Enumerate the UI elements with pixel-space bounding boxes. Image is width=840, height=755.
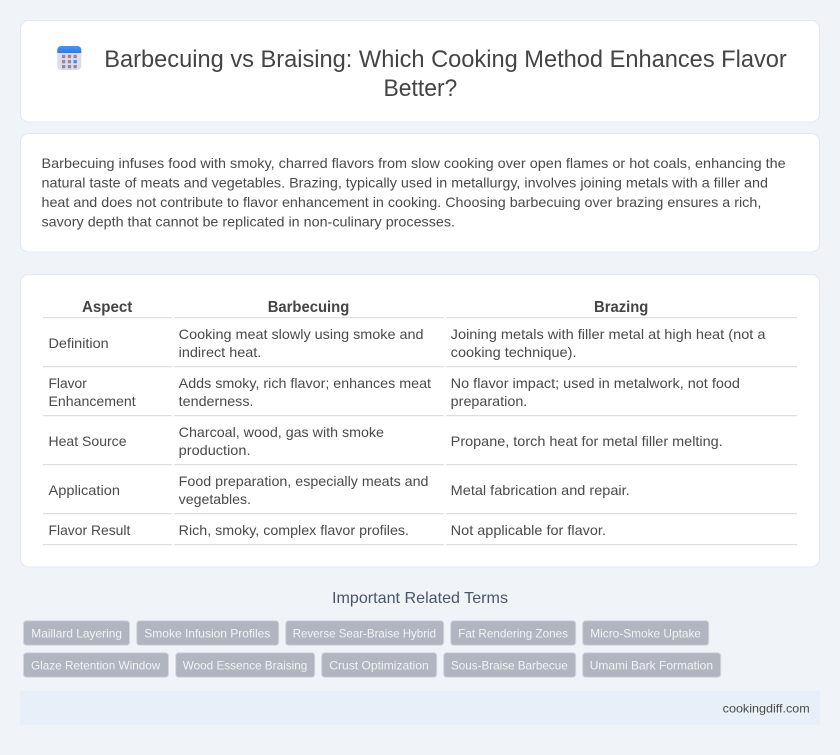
- row: flavor enhancement: No flavor impact; used in metalwork, not food: [451, 375, 740, 391]
- related term tags: Sous-Braise Barbecue: [451, 658, 568, 672]
- row: heat source: [48, 424, 723, 458]
- intro paragraph: natural taste of meats and vegetables. Brazing, typically used in metallurgy, involves joining metals with a filler and: [42, 174, 768, 190]
- row: definition: Joining metals with filler metal at high heat (not a: [451, 326, 766, 342]
- row: definition: Definition: [48, 335, 109, 351]
- related term tags: Micro-Smoke Uptake: [590, 626, 701, 640]
- row: heat source: Charcoal, wood, gas with smoke: [179, 424, 384, 440]
- title text: [104, 46, 787, 102]
- title text: Barbecuing vs Braising: Which Cooking Method Enhances Flavor: [104, 46, 787, 73]
- row: flavor enhancement: tenderness.: [179, 393, 254, 409]
- title text: Better?: [384, 75, 457, 102]
- row: definition: Cooking meat slowly using smoke and: [179, 326, 424, 342]
- panel: comparison table: [20, 274, 820, 567]
- row: definition: cooking technique).: [451, 344, 576, 360]
- row: flavor enhancement: Flavor: [48, 375, 87, 391]
- table header: Aspect: [82, 299, 133, 316]
- row: flavor result: [48, 522, 606, 538]
- row: flavor result: Flavor Result: [48, 522, 130, 538]
- row: application: Metal fabrication and repair.: [451, 482, 630, 498]
- related term tags: [24, 621, 721, 677]
- table header: Barbecuing: [268, 299, 349, 316]
- heading: important related terms: Important Related Terms: [332, 590, 508, 607]
- related term tags: Umami Bark Formation: [590, 658, 713, 672]
- related term tags: Crust Optimization: [329, 658, 429, 672]
- table header: [82, 299, 648, 316]
- related term tags: Wood Essence Braising: [183, 658, 307, 672]
- related term tags: Reverse Sear-Braise Hybrid: [293, 626, 436, 640]
- related term tags: Smoke Infusion Profiles: [144, 626, 270, 640]
- row: heat source: Heat Source: [48, 433, 127, 449]
- table header: Brazing: [594, 299, 648, 316]
- footer bar: cookingdiff.com: [723, 701, 810, 715]
- intro paragraph: heat and does not contribute to flavor enhancement in cooking. Choosing barbecuing over brazing ensures a rich,: [42, 194, 761, 210]
- row: flavor enhancement: Adds smoky, rich flavor; enhances meat: [179, 375, 431, 391]
- row: application: Application: [48, 482, 120, 498]
- row: flavor enhancement: preparation.: [451, 393, 527, 409]
- row: flavor result: Rich, smoky, complex flavor profiles.: [179, 522, 409, 538]
- row: definition: indirect heat.: [179, 344, 261, 360]
- row: heat source: Propane, torch heat for metal filler melting.: [451, 433, 723, 449]
- related term tags: Maillard Layering: [31, 626, 122, 640]
- related term tags: Glaze Retention Window: [31, 658, 161, 672]
- intro paragraph: [42, 155, 786, 229]
- panel: introduction: [20, 134, 820, 252]
- footer bar: [20, 691, 820, 725]
- related term tags: Fat Rendering Zones: [458, 626, 568, 640]
- intro paragraph: savory depth that cannot be replicated in non-culinary processes.: [42, 213, 455, 229]
- row: flavor enhancement: [48, 375, 740, 409]
- intro paragraph: Barbecuing infuses food with smoky, charred flavors from slow cooking over open flames or hot coals, enhancing the: [42, 155, 786, 171]
- row: flavor result: Not applicable for flavor.: [451, 522, 606, 538]
- row: application: Food preparation, especially meats and: [179, 473, 428, 489]
- panel: title: [20, 20, 820, 122]
- row: flavor enhancement: Enhancement: [48, 393, 136, 409]
- row: heat source: production.: [179, 442, 250, 458]
- row: application: [48, 473, 630, 507]
- icon: calendar: [57, 46, 81, 70]
- row: definition: [48, 326, 766, 360]
- row: application: vegetables.: [179, 491, 251, 507]
